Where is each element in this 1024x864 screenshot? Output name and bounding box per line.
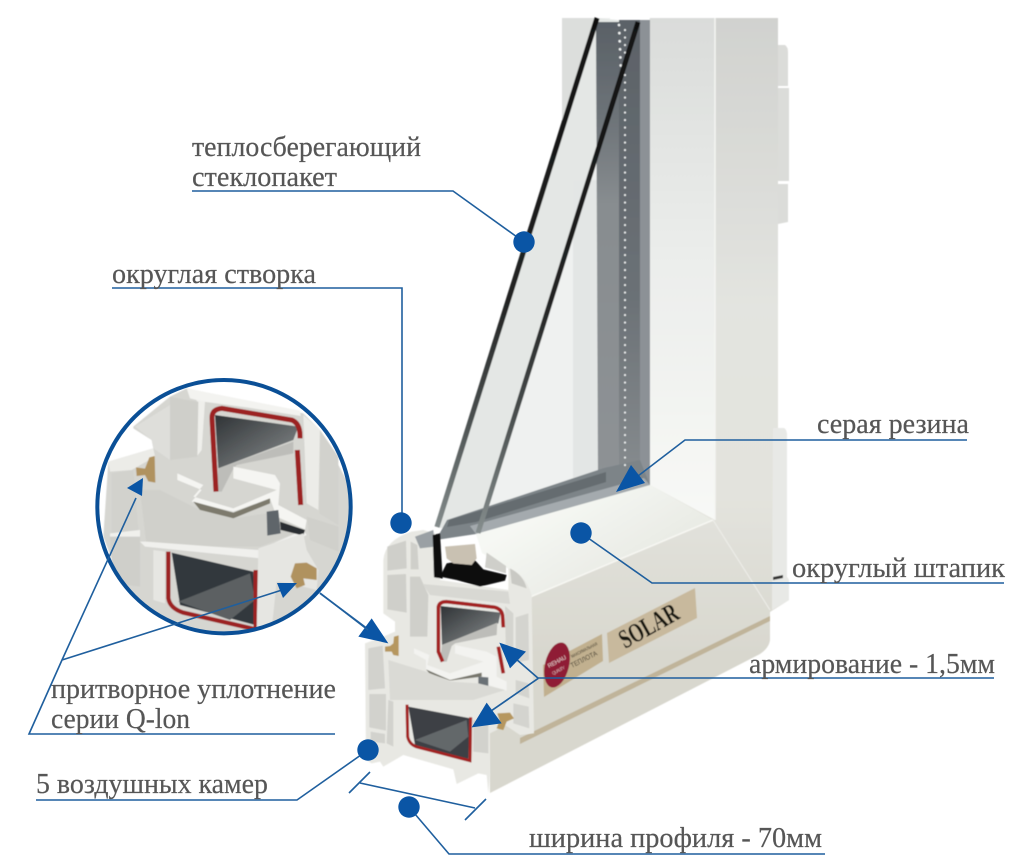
magnified steel upper	[215, 415, 298, 468]
magnified floor	[140, 490, 303, 547]
label: Q-lon seal: притворное уплотнение	[51, 673, 336, 705]
sealant	[445, 544, 477, 565]
sash floor	[423, 584, 510, 604]
profile cross-section	[320, 530, 538, 793]
label: air chambers: 5 воздушных камер	[36, 768, 268, 800]
upper shelf	[440, 623, 497, 662]
magnified hook	[177, 467, 307, 529]
spacer bar horizontal	[436, 460, 650, 540]
magnifier circle	[97, 380, 353, 633]
magnified floor rib	[140, 530, 307, 558]
frame back strip	[562, 18, 597, 130]
line from magnifier to section	[320, 593, 368, 630]
spacer dots	[624, 30, 626, 470]
callout: seal arrows	[29, 478, 335, 734]
frame chamfer edge	[530, 520, 713, 597]
SOLAR plate	[607, 588, 697, 663]
arrow: seal	[358, 618, 388, 643]
middle floor	[388, 660, 505, 700]
glass panes	[437, 18, 638, 533]
arrow: grey rubber	[616, 440, 967, 492]
callout: air chambers	[36, 739, 379, 800]
label: glass unit: теплосберегающий	[192, 131, 421, 163]
magnified white ribs	[257, 533, 318, 630]
arrows: reinforcement	[472, 643, 538, 727]
upper reinforcement	[438, 602, 503, 673]
black gasket	[440, 558, 507, 587]
lower steel interior	[408, 707, 471, 759]
dimension: profile width	[349, 772, 825, 854]
glazing bead sill	[476, 485, 713, 597]
label: rounded sash: округлая створка	[112, 258, 316, 290]
magnified block	[267, 510, 281, 536]
magnified seal top	[136, 456, 155, 483]
right seal	[497, 713, 514, 730]
callout: reinforcement line	[538, 677, 994, 679]
bead chambers	[505, 606, 529, 728]
small block	[478, 677, 488, 693]
SOLAR plate: SOLAR	[613, 597, 684, 654]
label: Q-lon seal: серии Q-lon	[51, 703, 190, 735]
corner seam	[713, 520, 770, 610]
logo plate	[540, 634, 603, 697]
glass spacer black	[433, 533, 443, 579]
callout: rounded sash	[112, 288, 412, 534]
callout: glass unit	[192, 191, 535, 253]
label: glass unit: стеклопакет	[192, 161, 337, 193]
bead hollow	[485, 553, 506, 573]
logo plate: REHAU	[547, 655, 568, 670]
top white rib	[187, 388, 301, 416]
magnified steel lower	[172, 553, 255, 625]
upper steel interior	[441, 606, 501, 645]
section silhouette	[365, 530, 534, 793]
label: grey rubber: серая резина	[817, 408, 969, 440]
glazing bead column	[650, 18, 715, 520]
frame body	[488, 18, 789, 793]
sash chambers	[387, 541, 428, 637]
label: rounded bead: округлый штапик	[792, 552, 1006, 584]
label: glass unit	[192, 131, 421, 193]
logo plate: МАКСИМАЛЬНАЯ	[570, 641, 598, 659]
lower reinforcement	[407, 705, 471, 761]
rubber edge end	[415, 530, 435, 548]
frame mitre line	[714, 18, 716, 520]
label: profile width: ширина профиля - 70мм	[529, 822, 822, 854]
window frame photo	[436, 18, 789, 793]
label: Q-lon seal	[51, 673, 336, 735]
frame chambers	[368, 646, 488, 753]
magnifier ring	[97, 380, 351, 633]
label: reinforcement: армирование - 1,5мм	[749, 648, 995, 680]
glass area	[437, 18, 610, 530]
logo plate: QUALITY	[551, 665, 566, 676]
callout: rounded bead	[570, 522, 1004, 583]
magnified shadow	[193, 498, 270, 518]
logo plate: ТЕПЛОТА	[570, 650, 599, 670]
hook shelf	[414, 645, 507, 691]
magnified profile base	[103, 388, 353, 633]
hook shadow	[426, 669, 482, 681]
spacer bar vertical	[596, 22, 620, 480]
hinges	[778, 45, 789, 224]
beige stripe	[520, 616, 770, 744]
magnified seal bottom	[291, 563, 317, 588]
right profile strip	[772, 428, 789, 610]
top left seal	[385, 635, 399, 656]
arrow line	[320, 593, 370, 631]
